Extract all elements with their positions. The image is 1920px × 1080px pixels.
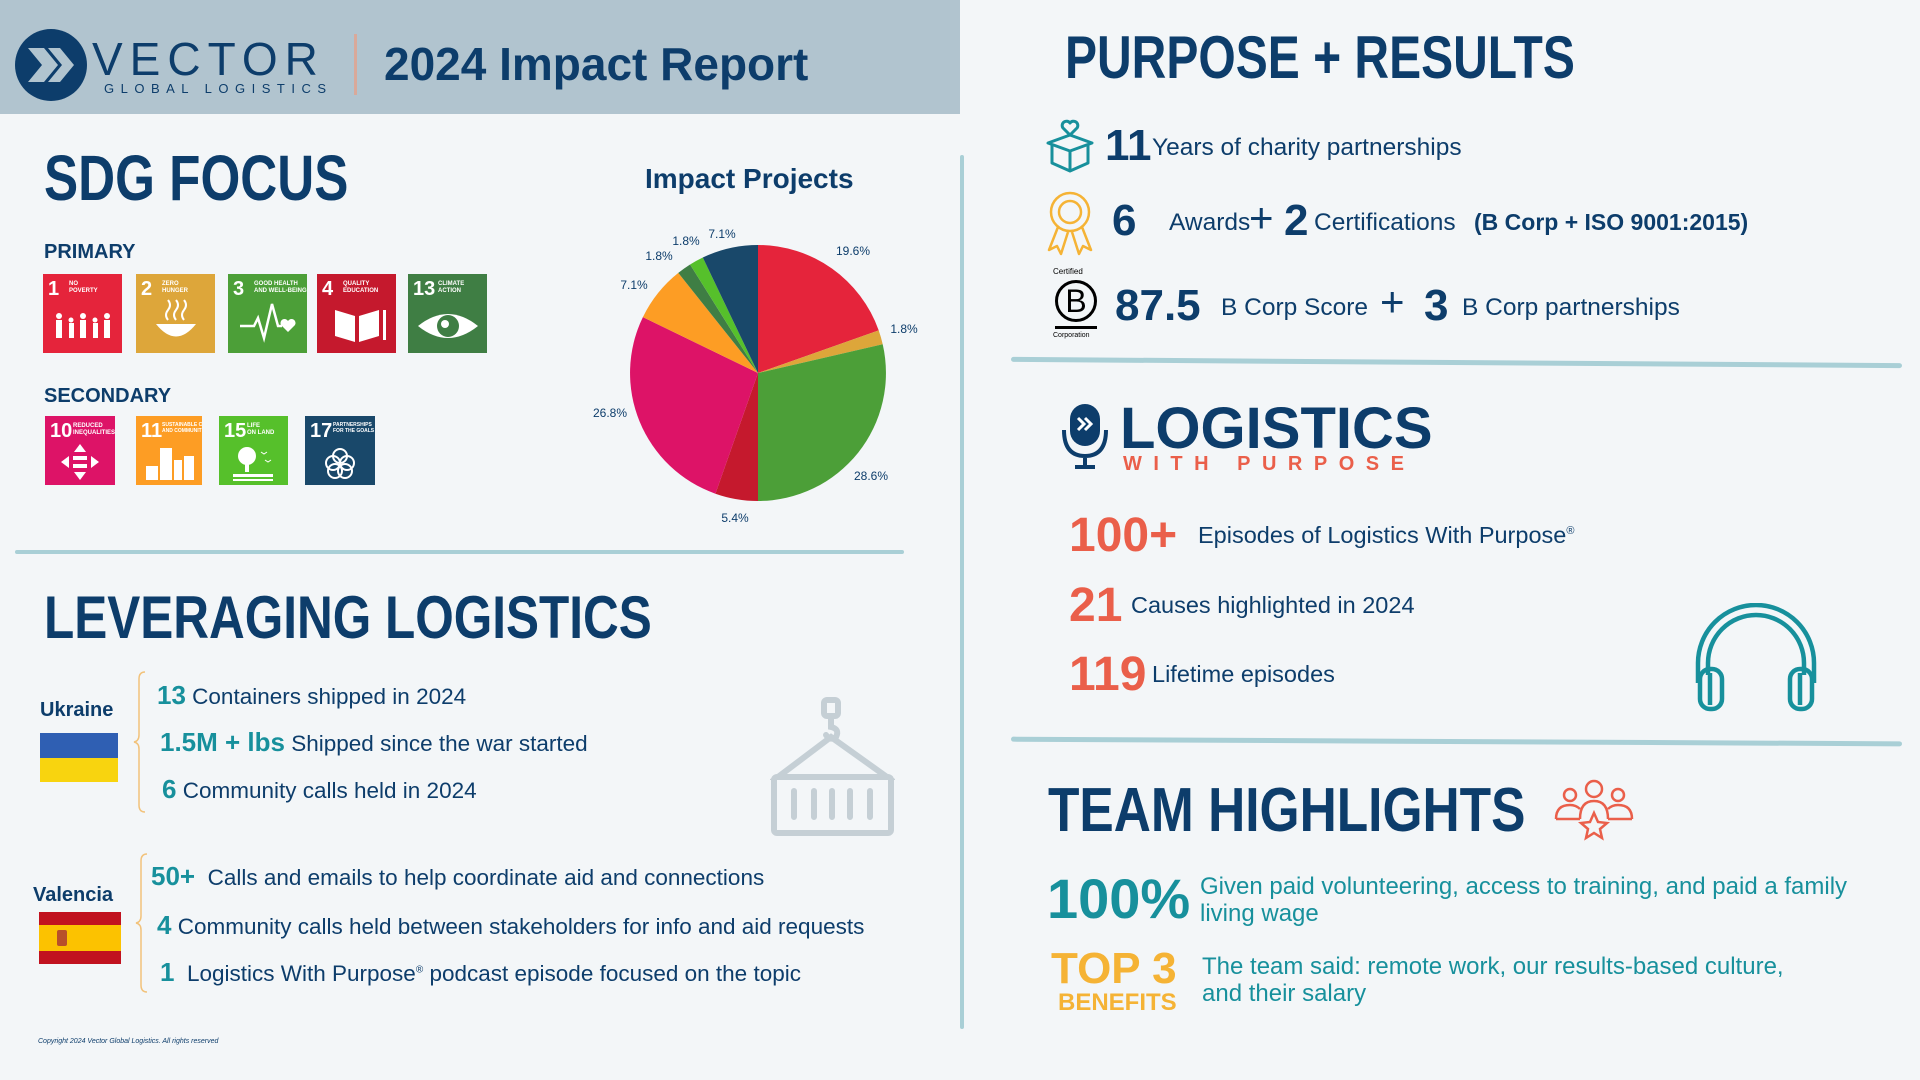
panel: logistics with purpose: Causes highlighted in 2024 (1131, 592, 1415, 618)
label: primary: PRIMARY (44, 241, 135, 263)
logo: vector: GLOBAL LOGISTICS (104, 81, 333, 96)
secondary sdg tiles: 11 (141, 420, 162, 442)
secondary sdg tiles: LIFE (247, 423, 260, 429)
row: awards (1048, 192, 1748, 256)
group: valencia (33, 853, 864, 993)
row: b corp (1053, 267, 1680, 339)
logo: logistics with purpose: LOGISTICS (1120, 396, 1433, 461)
panel: logistics with purpose: 21 (1069, 579, 1122, 632)
primary sdg tiles: EDUCATION (343, 288, 378, 294)
row: b corp: + (1380, 278, 1405, 325)
row: charity (1046, 120, 1462, 172)
primary sdg tiles: 1 (48, 278, 59, 300)
icon: spain flag (39, 912, 121, 964)
row: awards: Certifications (1314, 209, 1456, 236)
text: 7.1% (708, 227, 736, 241)
panel: purpose + results (1046, 24, 1748, 339)
stat: top 3 benefits: BENEFITS (1058, 989, 1177, 1016)
icon: team people (1554, 780, 1634, 840)
header band (0, 0, 960, 114)
primary sdg tiles: AND WELL-BEING (254, 288, 307, 294)
group: valencia: Valencia (33, 884, 113, 906)
row: b corp: 3 (1424, 281, 1448, 330)
heading: purpose + results: PURPOSE + RESULTS (1065, 24, 1575, 91)
panel: logistics with purpose: Episodes of Logistics With Purpose® (1198, 522, 1574, 548)
primary sdg tiles: NO (69, 281, 78, 287)
text: 1.8% (645, 249, 673, 263)
logo: vector: VECTOR (92, 33, 325, 85)
panel: logistics with purpose: 100+ (1069, 509, 1177, 562)
row: b corp: 87.5 (1115, 281, 1201, 330)
icon: gift box (1046, 120, 1094, 172)
secondary sdg tiles: REDUCED (73, 423, 103, 429)
icon: certified b corporation: B (1065, 283, 1087, 319)
row: awards: (B Corp + ISO 9001:2015) (1474, 209, 1748, 235)
text: 5.4% (721, 511, 749, 525)
row: charity: 11 (1105, 121, 1152, 170)
text: 28.6% (854, 469, 888, 483)
row: awards: Awards (1169, 209, 1250, 236)
primary sdg tiles: 13 (413, 278, 435, 300)
title: 2024 Impact Report (384, 38, 808, 90)
panel: team highlights: The team said: remote work, our results-based culture, and their salary (1202, 953, 1784, 1007)
label: secondary: SECONDARY (44, 385, 171, 407)
group: ukraine (40, 671, 588, 813)
heading: team highlights: TEAM HIGHLIGHTS (1048, 776, 1525, 845)
logo: vector (15, 29, 333, 101)
text: 7.1% (620, 278, 648, 292)
secondary sdg tiles: 10 (50, 420, 72, 442)
primary sdg tiles: QUALITY (343, 281, 369, 287)
panel: team highlights: Given paid volunteering, access to training, and paid a family living wage (1200, 873, 1847, 927)
row: charity: Years of charity partnerships (1152, 134, 1462, 161)
panel: sdg focus (43, 142, 487, 485)
icon: certified b corporation (1053, 267, 1097, 339)
icon: headphones (1696, 603, 1816, 712)
primary sdg tiles: 4 (322, 278, 333, 300)
icon: ukraine flag (40, 733, 118, 782)
copyright: Copyright 2024 Vector Global Logistics. All rights reserved (38, 1038, 218, 1045)
heading: sdg focus: SDG FOCUS (44, 142, 348, 214)
secondary sdg tiles: INEQUALITIES (73, 430, 115, 436)
secondary sdg tiles: 15 (224, 420, 246, 442)
secondary sdg tiles: FOR THE GOALS (333, 428, 374, 434)
stat: top 3 benefits (1051, 944, 1177, 1016)
text: 1.8% (890, 322, 918, 336)
panel: logistics with purpose: 119 (1069, 648, 1146, 701)
text: 1.8% (672, 234, 700, 248)
row: awards: 6 (1112, 196, 1136, 245)
group: ukraine: 13 Containers shipped in 2024 (157, 680, 466, 710)
secondary sdg tiles: ON LAND (247, 430, 274, 436)
text: 19.6% (836, 244, 870, 258)
group: ukraine: 6 Community calls held in 2024 (162, 774, 477, 804)
icon: award ribbon (1048, 192, 1092, 256)
logo: logistics with purpose (1062, 396, 1433, 475)
row: awards: + (1249, 194, 1274, 241)
panel: leveraging logistics (33, 584, 895, 993)
panel: team highlights (1047, 776, 1847, 1016)
group: valencia: 1 Logistics With Purpose® podcast episode focused on the topic (160, 957, 801, 987)
row: b corp: B Corp Score (1221, 294, 1368, 321)
secondary sdg tiles: PARTNERSHIPS (333, 422, 372, 428)
primary sdg tiles: 3 (233, 278, 244, 300)
primary sdg tiles: ACTION (438, 288, 461, 294)
row: awards: 2 (1284, 196, 1308, 245)
text: 26.8% (593, 406, 627, 420)
icon: shipping container (770, 697, 895, 836)
primary sdg tiles: HUNGER (162, 288, 188, 294)
row: b corp: B Corp partnerships (1462, 294, 1680, 321)
group: ukraine: 1.5M + lbs Shipped since the war started (160, 727, 588, 757)
group: ukraine: Ukraine (40, 699, 113, 721)
secondary sdg tiles (45, 416, 375, 485)
primary sdg tiles: 2 (141, 278, 152, 300)
stat: top 3 benefits: TOP 3 (1051, 944, 1177, 993)
secondary sdg tiles: 17 (310, 420, 332, 442)
panel: logistics with purpose (1062, 396, 1574, 701)
primary sdg tiles: CLIMATE (438, 281, 464, 287)
icon: certified b corporation: Certified (1053, 267, 1083, 276)
logo: logistics with purpose: WITH PURPOSE (1123, 453, 1415, 475)
stat: 100%: 100% (1047, 867, 1190, 930)
icon: certified b corporation: Corporation (1053, 332, 1090, 339)
primary sdg tiles: POVERTY (69, 288, 98, 294)
chart title: Impact Projects (645, 163, 854, 194)
panel: logistics with purpose: Lifetime episodes (1152, 661, 1335, 687)
primary sdg tiles: ZERO (162, 281, 179, 287)
primary sdg tiles (43, 274, 487, 353)
group: valencia: 50+ Calls and emails to help coordinate aid and connections (151, 861, 764, 891)
primary sdg tiles: GOOD HEALTH (254, 281, 298, 287)
group: valencia: 4 Community calls held between stakeholders for info and aid requests (157, 910, 864, 940)
heading: leveraging logistics: LEVERAGING LOGISTICS (44, 584, 652, 651)
